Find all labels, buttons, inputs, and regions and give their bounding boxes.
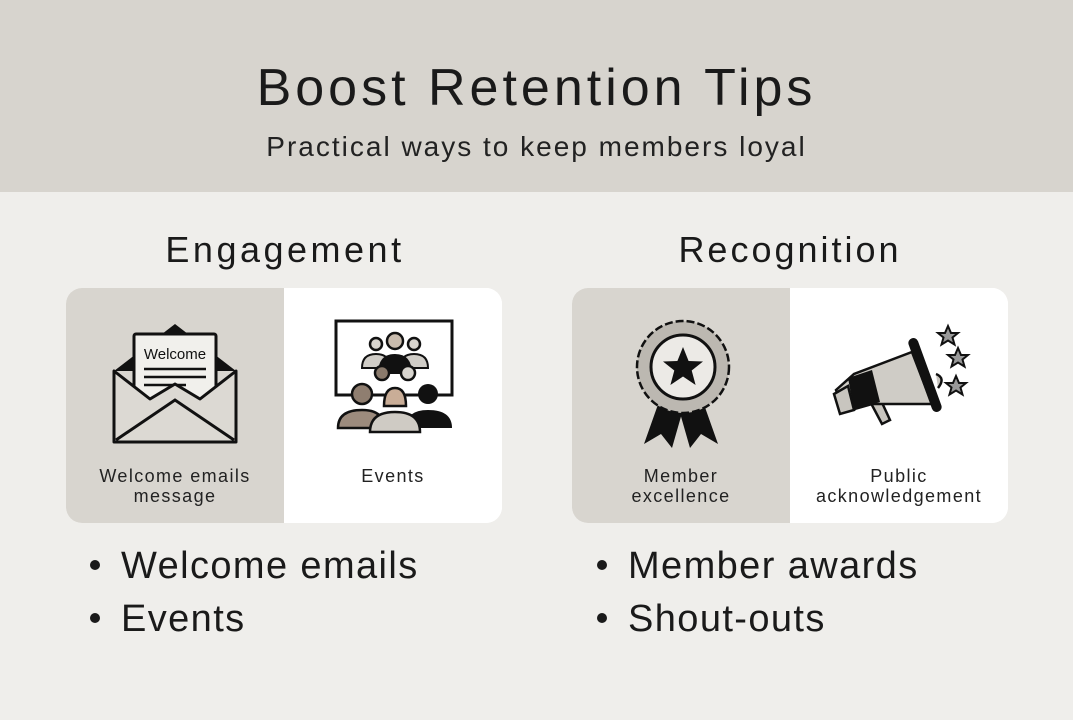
caption: Member	[644, 466, 718, 486]
tile: events	[284, 288, 502, 523]
heading: Engagement: Engagement	[165, 229, 405, 270]
bullet list: recognition: Shout-outs	[628, 598, 826, 640]
bullet list: recognition: Member awards	[628, 545, 919, 587]
header band	[0, 0, 1073, 192]
tile: public acknowledgement	[790, 288, 1008, 523]
icon: award badge	[636, 320, 730, 448]
caption: Welcome emails	[99, 466, 251, 486]
title: Boost Retention Tips	[257, 59, 816, 117]
icon: megaphone	[832, 324, 971, 426]
icon: audience	[334, 320, 454, 434]
panel: recognition card	[572, 288, 1008, 523]
bullet list: engagement: Welcome emails	[121, 545, 419, 587]
bullet list: engagement: Events	[121, 598, 246, 640]
tile: member excellence	[572, 288, 790, 523]
caption	[816, 466, 982, 506]
subtitle: Practical ways to keep members loyal	[266, 131, 807, 162]
caption	[631, 466, 731, 506]
caption: Public	[870, 466, 928, 486]
tile: welcome emails	[66, 288, 284, 523]
bullet list: recognition	[597, 545, 919, 640]
heading: Recognition: Recognition	[678, 229, 902, 270]
caption: excellence	[631, 486, 731, 506]
icon: envelope: Welcome	[144, 346, 206, 363]
caption	[99, 466, 251, 506]
caption: acknowledgement	[816, 486, 982, 506]
bullet list: engagement	[90, 545, 419, 640]
caption: Events	[361, 466, 425, 486]
icon: envelope	[112, 324, 238, 444]
caption: message	[134, 486, 216, 506]
panel: engagement card	[66, 288, 502, 523]
